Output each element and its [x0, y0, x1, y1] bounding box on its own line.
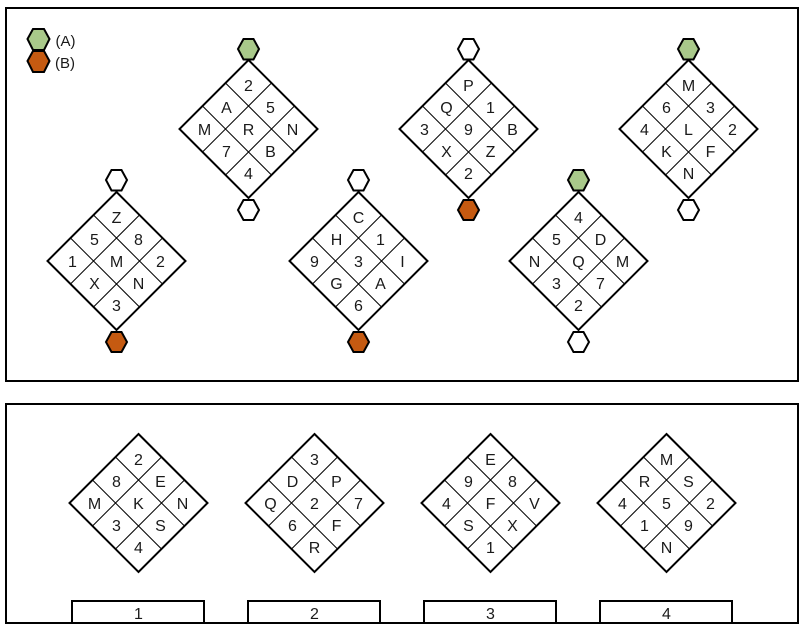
answer diamond 4: M: [660, 452, 673, 469]
diamond puzzle 1: A: [221, 100, 232, 117]
top hexagon: white: [106, 170, 127, 190]
answer diamond 4: 4: [618, 496, 627, 513]
diamond puzzle 6: M: [616, 254, 629, 271]
diamond puzzle 1: N: [287, 122, 298, 139]
answer diamond 4: S: [683, 474, 694, 491]
diamond puzzle 3: 6: [662, 100, 671, 117]
diamond puzzle 4: X: [89, 276, 100, 293]
diamond puzzle 3: K: [661, 144, 672, 161]
answer diamond 3: 9: [464, 474, 473, 491]
answer diamond 3: [422, 434, 560, 572]
diamond puzzle 2: 9: [464, 122, 473, 139]
answer diamond 1: 8: [112, 474, 121, 491]
answer diamond 2: F: [332, 518, 342, 535]
bottom hexagon: white: [238, 200, 259, 220]
answer diamond 3: S: [463, 518, 474, 535]
diamond puzzle 3: L: [684, 122, 693, 139]
top hexagon: green: [238, 39, 259, 60]
diamond puzzle 2: Z: [486, 144, 496, 161]
answer diamond 4: 5: [662, 496, 671, 513]
answer diamond 1: 3: [112, 518, 121, 535]
bottom hexagon: brown: [458, 200, 479, 220]
answer diamond 2: 6: [288, 518, 297, 535]
answer diamond 1: 4: [134, 540, 143, 557]
legend label B: (B): [55, 55, 75, 72]
answer diamond 1: K: [133, 496, 144, 513]
diamond puzzle 4: 5: [90, 232, 99, 249]
diamond puzzle 5: 1: [376, 232, 385, 249]
panel: answer options frame: [6, 404, 798, 623]
diamond puzzle 5: G: [330, 276, 343, 293]
diamond puzzle 4: Z: [112, 210, 122, 227]
diamond puzzle 5: 3: [354, 254, 363, 271]
diamond puzzle 1: R: [243, 122, 254, 139]
diamond puzzle 4: 1: [68, 254, 77, 271]
answer button 4: 4: [662, 606, 671, 623]
diamond puzzle 6: 4: [574, 210, 583, 227]
panel: puzzle frame: [6, 8, 798, 381]
diamond puzzle 3: N: [683, 166, 694, 183]
answer diamond 2: Q: [264, 496, 277, 513]
diamond puzzle 5: C: [353, 210, 364, 227]
answer button 3: [424, 601, 556, 623]
answer diamond 4: 1: [640, 518, 649, 535]
answer diamond 3: V: [529, 496, 540, 513]
answer diamond 1: M: [88, 496, 101, 513]
answer button 1: [72, 601, 204, 623]
answer button 2: [248, 601, 380, 623]
diamond puzzle 3: 4: [640, 122, 649, 139]
answer diamond 2: P: [331, 474, 342, 491]
answer diamond 1: [70, 434, 208, 572]
diamond puzzle 2: Q: [440, 100, 453, 117]
top hexagon: green: [678, 39, 699, 60]
bottom hexagon: brown: [348, 332, 369, 352]
diamond puzzle 5: [290, 170, 428, 352]
diamond puzzle 2: X: [441, 144, 452, 161]
diamond puzzle 3: 2: [728, 122, 737, 139]
answer diamond 4: [598, 434, 736, 572]
diamond puzzle 5: 6: [354, 298, 363, 315]
answer diamond 3: 8: [508, 474, 517, 491]
bottom hexagon: white: [568, 332, 589, 352]
diamond puzzle 4: N: [133, 276, 144, 293]
answer diamond 2: 2: [310, 496, 319, 513]
diamond puzzle 2: 3: [420, 122, 429, 139]
answer button 3: 3: [486, 606, 495, 623]
answer diamond 4: R: [639, 474, 650, 491]
answer diamond 3: 4: [442, 496, 451, 513]
bottom hexagon: white: [678, 200, 699, 220]
diamond puzzle 1: B: [265, 144, 276, 161]
diamond puzzle 1: 2: [244, 78, 253, 95]
answer button 4: [600, 601, 732, 623]
diamond puzzle 6: Q: [572, 254, 585, 271]
icon: brown hexagon B: [28, 51, 50, 72]
icon: green hexagon A: [28, 29, 50, 50]
diamond puzzle 6: N: [529, 254, 540, 271]
top hexagon: green: [568, 170, 589, 190]
diamond puzzle 2: 1: [486, 100, 495, 117]
bottom hexagon: brown: [106, 332, 127, 352]
diamond puzzle 4: 2: [156, 254, 165, 271]
answer button 1: 1: [134, 606, 143, 623]
diamond puzzle 3: [620, 39, 758, 220]
diamond puzzle 1: 7: [222, 144, 231, 161]
diamond puzzle 5: A: [375, 276, 386, 293]
answer diamond 3: X: [507, 518, 518, 535]
answer diamond 4: N: [661, 540, 672, 557]
diamond puzzle 2: P: [463, 78, 474, 95]
answer diamond 1: N: [177, 496, 188, 513]
diamond puzzle 5: 9: [310, 254, 319, 271]
diamond puzzle 1: 4: [244, 166, 253, 183]
answer diamond 3: E: [485, 452, 496, 469]
diamond puzzle 3: F: [706, 144, 716, 161]
answer diamond 2: 3: [310, 452, 319, 469]
diamond puzzle 2: B: [507, 122, 518, 139]
diamond puzzle 4: 3: [112, 298, 121, 315]
legend: [28, 29, 76, 72]
answer diamond 1: 2: [134, 452, 143, 469]
legend label A: (A): [56, 33, 76, 50]
diamond puzzle 6: 3: [552, 276, 561, 293]
diamond puzzle 2: [400, 39, 538, 220]
diamond puzzle 5: H: [331, 232, 342, 249]
answer diamond 4: 9: [684, 518, 693, 535]
diamond puzzle 6: 2: [574, 298, 583, 315]
answer button 2: 2: [310, 606, 319, 623]
diamond puzzle 1: 5: [266, 100, 275, 117]
answer diamond 3: 1: [486, 540, 495, 557]
diamond puzzle 6: D: [595, 232, 606, 249]
diamond puzzle 4: [48, 170, 186, 352]
answer diamond 2: [246, 434, 384, 572]
diamond puzzle 1: M: [198, 122, 211, 139]
answer diamond 1: E: [155, 474, 166, 491]
top hexagon: white: [458, 39, 479, 60]
diamond puzzle 4: M: [110, 254, 123, 271]
answer diamond 2: R: [309, 540, 320, 557]
diamond puzzle 1: [180, 39, 318, 220]
diamond puzzle 2: 2: [464, 166, 473, 183]
diamond puzzle 4: 8: [134, 232, 143, 249]
top hexagon: white: [348, 170, 369, 190]
diamond puzzle 3: M: [682, 78, 695, 95]
diamond puzzle 3: 3: [706, 100, 715, 117]
answer diamond 4: 2: [706, 496, 715, 513]
diamond puzzle 5: I: [400, 254, 405, 271]
answer diamond 3: F: [486, 496, 496, 513]
answer diamond 1: S: [155, 518, 166, 535]
answer diamond 2: D: [287, 474, 298, 491]
diamond puzzle 6: [510, 170, 648, 352]
answer diamond 2: 7: [354, 496, 363, 513]
diamond puzzle 6: 7: [596, 276, 605, 293]
diamond puzzle 6: 5: [552, 232, 561, 249]
